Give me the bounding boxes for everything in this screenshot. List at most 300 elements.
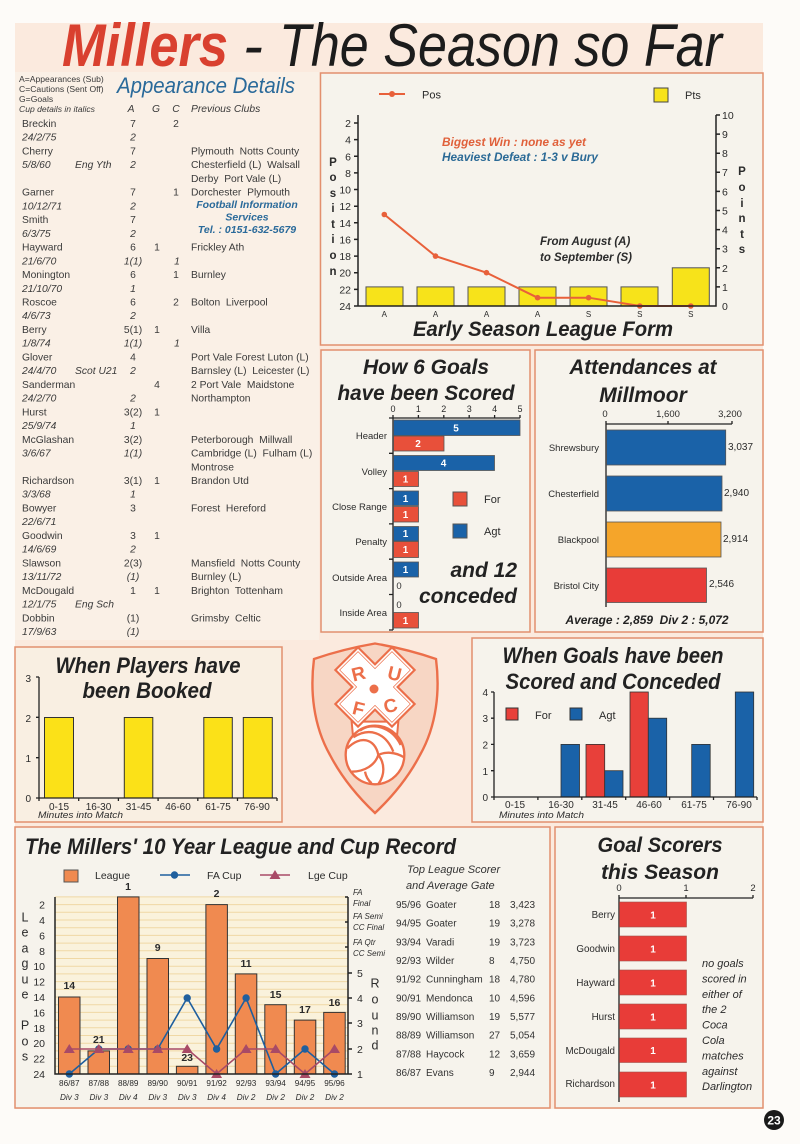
axes and tick labels: 6	[722, 186, 728, 198]
table: top league scorer and average gate: Goater	[426, 919, 457, 930]
axis title: league pos: u	[22, 972, 29, 986]
axis title: position: n	[329, 266, 337, 278]
table: player rows: Dorchester Plymouth	[191, 188, 290, 199]
table: player rows: (1)	[127, 627, 139, 638]
panel: appearance details	[15, 72, 319, 640]
table: player rows: 1(1)	[124, 256, 142, 267]
bar chart: attendances	[606, 430, 726, 602]
table: player rows: 2	[129, 133, 136, 144]
table: top league scorer and average gate: 2,944	[510, 1068, 535, 1079]
axes and tick labels: 6	[345, 151, 351, 163]
table: player rows: Roscoe	[22, 298, 57, 308]
table: player rows: 3/6/67	[22, 448, 52, 460]
heading: ten year record: The Millers' 10 Year League and Cup Record	[25, 834, 457, 859]
bar value labels: 16	[329, 997, 340, 1009]
table: player rows: Brandon Utd	[191, 476, 249, 487]
table: top league scorer and average gate: 90/91	[396, 993, 421, 1004]
title: Millers	[62, 12, 228, 79]
axes and tick labels: Div 2	[266, 1093, 285, 1102]
axes and tick labels: 12	[339, 201, 351, 213]
table: player rows: 7	[130, 215, 136, 226]
table: player rows: 6	[130, 298, 136, 308]
table: player rows: 2	[129, 545, 136, 556]
bar values: 1	[403, 565, 409, 576]
table: player rows: 3(1)	[124, 476, 142, 487]
note: no goals in coca cola matches	[702, 958, 752, 1093]
note: no goals in coca cola matches: no goals	[702, 958, 744, 970]
axis title: position: o	[329, 172, 337, 184]
table: player rows: 1(1)	[124, 448, 142, 460]
table: player rows: (1)	[127, 572, 139, 583]
table: top league scorer and average gate: Goater	[426, 900, 457, 911]
heading: when goals: Scored and Conceded	[506, 669, 721, 694]
axis title: round: R	[370, 976, 380, 990]
bar values: 1	[403, 545, 409, 556]
axis title: league pos: P	[21, 1018, 29, 1032]
axis title: position: P	[329, 157, 337, 169]
axis labels and ticks: Volley	[362, 467, 387, 478]
axes and tick labels: 86/87	[59, 1079, 80, 1088]
heading: early season league form: Early Season League Form	[413, 318, 673, 341]
axes and tick labels: 90/91	[177, 1079, 198, 1088]
axis title: league pos: s	[22, 1050, 28, 1064]
table: player rows: 6	[130, 243, 136, 254]
axis: 0	[616, 883, 622, 894]
bar values: 1	[403, 494, 409, 505]
table header: G	[152, 104, 160, 115]
bar value labels: 2	[214, 888, 220, 900]
note: averages: Average : 2,859 Div 2 : 5,072	[564, 615, 729, 627]
axis title: points: t	[740, 229, 744, 241]
table: player rows: 3	[130, 503, 136, 514]
table: top league scorer and average gate: 5,577	[510, 1012, 535, 1023]
heading: appearance details: Appearance Details	[115, 73, 295, 98]
table: player rows: 1	[130, 490, 136, 501]
table: player rows: Smith	[22, 215, 49, 226]
icon: football	[346, 722, 404, 784]
note: no goals in coca cola matches: against	[702, 1066, 738, 1078]
table header: C	[172, 104, 180, 115]
axes and labels: 61-75	[205, 802, 231, 813]
category labels: Blackpool	[558, 535, 599, 546]
axis title: position	[329, 157, 337, 278]
bar values: 1	[403, 616, 409, 627]
axis labels and ticks: 1	[416, 404, 421, 414]
axis labels and ticks: 2	[441, 404, 446, 414]
legend: league, fa cup, league cup: League	[95, 870, 130, 882]
table: player rows: Northampton	[191, 394, 251, 405]
value labels: 2,914	[723, 534, 748, 545]
value labels: 3,037	[728, 442, 753, 453]
page number: 23	[767, 1114, 781, 1128]
table: player rows: Burnley (L)	[191, 572, 241, 583]
axis: 2	[750, 883, 756, 894]
player labels: McDougald	[565, 1046, 615, 1057]
table: player rows: 24/2/70	[21, 394, 57, 405]
table: top league scorer and average gate: 94/95	[396, 919, 421, 930]
axes and tick labels: 18	[33, 1023, 45, 1035]
table: player rows: 2	[173, 119, 179, 130]
axes and tick labels: 6	[39, 930, 45, 942]
bar values: 1	[650, 978, 656, 990]
axis labels and ticks: Close Range	[332, 502, 387, 513]
bar values: 1	[403, 510, 409, 521]
bar value labels: 17	[299, 1004, 311, 1016]
axes and labels: 16-30	[548, 800, 574, 811]
page number	[764, 1110, 784, 1130]
heading: when players booked	[56, 653, 240, 703]
table: player rows: 1	[154, 243, 160, 254]
axes and tick labels: A	[382, 310, 388, 319]
axes and labels: 3	[25, 674, 31, 685]
callout: football information services: Services	[225, 212, 269, 224]
axis title: round: o	[372, 992, 379, 1006]
table: player rows: 7	[130, 119, 136, 130]
table: top league scorer and average gate: 27	[489, 1031, 501, 1042]
table: player rows: Mansfield Notts County	[191, 558, 301, 569]
bar values: 4	[441, 458, 447, 470]
axes and tick labels: 16	[339, 234, 351, 246]
table: player rows: 7	[130, 188, 136, 199]
heading: how 6 goals: How 6 Goals	[363, 356, 489, 379]
axes and tick labels: Div 2	[237, 1093, 256, 1102]
table: player rows: Bolton Liverpool	[191, 298, 268, 308]
table: player rows: 2 Port Vale Maidstone	[191, 380, 295, 391]
key to abbreviations: A=Appearances (Sub)	[19, 74, 104, 84]
axes and tick labels: Div 2	[325, 1093, 344, 1102]
icon: cross with letters: F	[350, 698, 367, 721]
table header: Previous Clubs	[191, 104, 260, 115]
bar values: 1	[650, 1080, 656, 1092]
axes and tick labels: 12	[33, 977, 45, 989]
bar chart: goals by type	[394, 420, 520, 628]
table: player rows: 6	[130, 270, 136, 281]
table: player rows: Brighton Tottenham	[191, 586, 283, 597]
legend: for and against: Agt	[484, 526, 501, 538]
axes and labels: 76-90	[244, 802, 270, 813]
category labels: Chesterfield	[548, 489, 599, 500]
axes and labels: 46-60	[165, 802, 191, 813]
bar chart: league position	[58, 897, 345, 1074]
panel: early season league form	[320, 73, 763, 345]
axes and tick labels: 1	[357, 1069, 363, 1081]
table: top league scorer and average gate: 19	[489, 937, 501, 948]
table: top league scorer and average gate: 8	[489, 956, 495, 967]
axes and tick labels: 4	[345, 135, 351, 147]
axes and tick labels: 9	[722, 129, 728, 141]
axes and labels: 46-60	[636, 800, 662, 811]
table: player rows: 1/8/74	[22, 339, 51, 350]
table: player rows: Breckin	[22, 119, 57, 130]
table: player rows: Garner	[22, 188, 55, 199]
table: player rows: 3(2)	[124, 435, 142, 446]
table: player rows: 10/12/71	[22, 201, 62, 212]
note: biggest win and heaviest defeat: Biggest Win : none as yet	[442, 137, 587, 149]
table: top league scorer and average gate: 3,278	[510, 919, 535, 930]
category labels	[548, 443, 599, 592]
table: top league scorer and average gate: 4,596	[510, 993, 535, 1004]
axis title: league pos: e	[22, 926, 29, 940]
axes and tick labels: 8	[345, 168, 351, 180]
table: player rows: 1	[154, 586, 160, 597]
table: player rows: 7	[130, 146, 136, 158]
heading: attendances: Attendances at	[569, 356, 717, 379]
table: player rows: 21/6/70	[21, 256, 57, 267]
axis labels and ticks: 5	[517, 404, 523, 414]
table: top league scorer and average gate: and Average Gate	[406, 880, 495, 892]
table: player rows: Peterborough Millwall	[191, 435, 292, 446]
axes and tick labels: 3	[722, 244, 728, 256]
bar value labels: 14	[63, 980, 75, 992]
axes and labels: 0-15	[49, 802, 69, 813]
note: biggest win and heaviest defeat	[442, 137, 599, 164]
axis labels and ticks: 0	[390, 404, 396, 414]
table: player rows: 1	[154, 407, 160, 418]
axes and labels: 16-30	[86, 802, 112, 813]
bar value labels: 9	[155, 942, 161, 954]
player labels: Berry	[592, 910, 615, 921]
table: top league scorer and average gate: 4,780	[510, 975, 535, 986]
axes and labels: 31-45	[592, 800, 618, 811]
axes and labels: 4	[482, 688, 488, 699]
table: player rows: Cambridge (L) Fulham (L)	[191, 448, 312, 460]
axes and tick labels: 8	[39, 946, 45, 958]
value labels: 2,546	[709, 579, 734, 590]
heading: attendances: Millmoor	[599, 384, 689, 407]
table: top league scorer and average gate: 18	[489, 975, 501, 986]
axes and tick labels: S	[586, 310, 591, 319]
table: player rows: Dobbin	[22, 613, 55, 624]
axis title: round	[370, 976, 380, 1052]
table header: A	[127, 104, 135, 115]
note: no goals in coca cola matches: matches	[702, 1050, 744, 1062]
table: player rows: 24/2/75	[21, 133, 57, 144]
axes and tick labels: Div 2	[296, 1093, 315, 1102]
legend: league, fa cup, league cup: Lge Cup	[308, 870, 348, 882]
table: top league scorer and average gate: 3,723	[510, 937, 535, 948]
icon: cross with letters: R	[349, 663, 368, 687]
axis labels and ticks: Penalty	[355, 537, 387, 548]
legend: position and points	[379, 88, 701, 102]
axes and labels: 76-90	[726, 800, 752, 811]
axis title: round: n	[372, 1024, 379, 1038]
note: no goals in coca cola matches: scored in	[702, 973, 747, 985]
axes and tick labels: 16	[33, 1007, 45, 1019]
axes and tick labels: 2	[357, 1044, 363, 1056]
key to abbreviations: C=Cautions (Sent Off)	[19, 84, 104, 94]
note: no goals in coca cola matches: Coca	[702, 1020, 728, 1032]
bar value labels	[63, 881, 340, 1064]
bar chart: points	[366, 268, 709, 306]
axes and labels: 2	[25, 714, 31, 725]
cup round labels: FA Qtr	[353, 938, 376, 947]
axes and tick labels: 10	[722, 110, 734, 122]
cup round labels: CC Final	[353, 923, 384, 932]
bar values	[650, 910, 656, 1092]
table: player rows: 2(3)	[124, 558, 142, 569]
axes and tick labels: 0	[722, 301, 728, 313]
legend: for and against: Agt	[599, 710, 616, 722]
table: player rows: Berry	[22, 325, 47, 336]
table: top league scorer and average gate: 3,659	[510, 1049, 535, 1060]
axes and tick labels: 8	[722, 148, 728, 160]
table: player rows: 2	[129, 160, 136, 171]
heading: when players booked: been Booked	[82, 678, 212, 703]
table: player rows: Cherry	[22, 146, 54, 158]
table: player rows: 12/1/75	[22, 600, 57, 610]
table: player rows: 13/11/72	[22, 572, 62, 583]
bar chart: goals by minute	[561, 692, 754, 797]
axis title: points: P	[738, 166, 746, 178]
table: player rows: Montrose	[191, 462, 234, 473]
axis title: points: i	[740, 198, 744, 210]
axes and tick labels: Div 3	[178, 1093, 197, 1102]
bar value labels: 21	[93, 1034, 105, 1046]
table: top league scorer and average gate: Cunningham	[426, 975, 483, 986]
table: player rows: 3	[130, 531, 136, 542]
table: player rows: Frickley Ath	[191, 243, 244, 254]
axes and labels: 0	[25, 794, 31, 805]
axes and tick labels: A	[484, 310, 490, 319]
legend: position and points: Pts	[685, 90, 701, 102]
table: top league scorer and average gate: 93/94	[396, 937, 421, 948]
axes and tick labels: 4	[357, 993, 363, 1005]
table: player rows: Glover	[22, 352, 53, 363]
category labels: Bristol City	[554, 581, 599, 592]
icon: cross with letters: C	[381, 695, 400, 719]
axes and tick labels: 24	[339, 301, 351, 313]
value labels	[709, 442, 753, 590]
axis title: position: i	[331, 203, 335, 215]
table: player rows: Hayward	[22, 243, 63, 254]
axes and tick labels: 92/93	[236, 1079, 257, 1088]
table: top league scorer and average gate: 91/92	[396, 975, 421, 986]
table: player rows: Richardson	[22, 476, 74, 487]
table: player rows: 4/6/73	[22, 311, 51, 322]
axis labels and ticks: Outside Area	[332, 573, 388, 584]
category labels: Shrewsbury	[549, 443, 599, 454]
table: player rows: 5(1)	[124, 325, 142, 336]
bar values: 1	[650, 1012, 656, 1024]
axis title: position: i	[331, 234, 335, 246]
bar value labels: 1	[125, 881, 131, 893]
table: top league scorer and average gate: Evans	[426, 1068, 454, 1079]
table: top league scorer and average gate: 89/90	[396, 1012, 421, 1023]
bar values: 2	[415, 439, 421, 450]
title: -	[243, 12, 263, 79]
table: top league scorer and average gate: 95/96	[396, 900, 421, 911]
table: top league scorer and average gate: Mendonca	[426, 993, 473, 1004]
table: player rows: 25/9/74	[21, 421, 57, 432]
table: top league scorer and average gate: Williamson	[426, 1031, 474, 1042]
axes and tick labels: 89/90	[147, 1079, 168, 1088]
icon: cross with letters: U	[385, 663, 404, 687]
player labels: Hurst	[592, 1012, 615, 1023]
panel: when players have been booked	[15, 647, 282, 822]
table: player rows: Port Vale Forest Luton (L)	[191, 352, 309, 363]
axis: 3,200	[718, 409, 742, 420]
bar values: 1	[650, 944, 656, 956]
panel: how goals have been scored	[321, 350, 530, 632]
axis: 1,600	[656, 409, 680, 420]
table: top league scorer and average gate: 92/93	[396, 956, 421, 967]
axis title: points: s	[739, 244, 745, 256]
table header	[127, 104, 260, 115]
player labels	[565, 910, 615, 1090]
heading: how 6 goals: have been Scored	[338, 382, 516, 405]
table: player rows: 5/8/60	[22, 160, 51, 171]
player labels: Richardson	[565, 1079, 615, 1090]
bar chart: scorers	[620, 902, 686, 1097]
note: and 12 conceded: conceded	[419, 585, 518, 608]
note: and 12 conceded	[419, 559, 518, 608]
note: no goals in coca cola matches: either of	[702, 989, 743, 1001]
axis title: points	[738, 166, 746, 256]
axes and tick labels: 20	[339, 268, 351, 280]
axes and tick labels: 87/88	[89, 1079, 109, 1088]
table: player rows: 2	[129, 229, 136, 240]
key to abbreviations	[19, 74, 104, 114]
callout: football information services: Tel. : 0151-632-5679	[198, 224, 296, 236]
axes and tick labels: 5	[722, 206, 728, 218]
table: player rows: 1	[130, 284, 136, 295]
axes and tick labels: 2	[722, 263, 728, 275]
axes and tick labels: Div 3	[60, 1093, 79, 1102]
axes and labels: Minutes into Match	[38, 810, 123, 820]
table: top league scorer and average gate: 88/89	[396, 1031, 421, 1042]
axes and tick labels: 2	[345, 118, 351, 130]
title	[62, 12, 724, 79]
table: player rows: Slawson	[22, 558, 61, 569]
axis labels and ticks: Inside Area	[339, 608, 388, 619]
axes and tick labels: Div 4	[119, 1093, 138, 1102]
table: player rows: 1	[154, 325, 160, 336]
note: month range: to September (S)	[540, 252, 632, 264]
axis title: league pos: o	[22, 1034, 29, 1048]
note: month range	[540, 236, 632, 264]
table: player rows: 4	[154, 380, 160, 391]
legend: position and points: Pos	[422, 90, 441, 102]
legend: for and against	[453, 492, 501, 538]
panel: ten year league and cup record	[15, 827, 550, 1108]
axis title: round: d	[372, 1038, 379, 1052]
cup round labels: CC Semi	[353, 949, 385, 958]
axes and labels	[25, 674, 277, 820]
table: top league scorer and average gate: 19	[489, 919, 501, 930]
player labels: Goodwin	[576, 944, 615, 955]
axes and labels: 0-15	[505, 800, 525, 811]
table: top league scorer and average gate: 10	[489, 993, 501, 1004]
axis labels and ticks: Header	[356, 431, 387, 442]
table: top league scorer and average gate: Williamson	[426, 1012, 474, 1023]
panel: attendances at millmoor	[535, 350, 763, 632]
axis title: points: o	[738, 182, 746, 194]
axes and tick labels: A	[433, 310, 439, 319]
axes and tick labels: 18	[339, 251, 351, 263]
axes and tick labels: 4	[39, 915, 45, 927]
table: top league scorer and average gate: Wilder	[426, 956, 455, 967]
table: player rows: Villa	[191, 325, 211, 336]
chart area	[55, 897, 348, 1074]
cup round labels: FA Semi	[353, 912, 383, 921]
axes and labels: 61-75	[681, 800, 707, 811]
note: month range: From August (A)	[540, 236, 630, 248]
axes and tick labels: 10	[339, 184, 351, 196]
heading: when players booked: When Players have	[56, 653, 240, 678]
axis title: position: o	[329, 250, 337, 262]
axes and tick labels: Div 4	[207, 1093, 226, 1102]
note: no goals in coca cola matches: Darlington	[702, 1081, 752, 1093]
